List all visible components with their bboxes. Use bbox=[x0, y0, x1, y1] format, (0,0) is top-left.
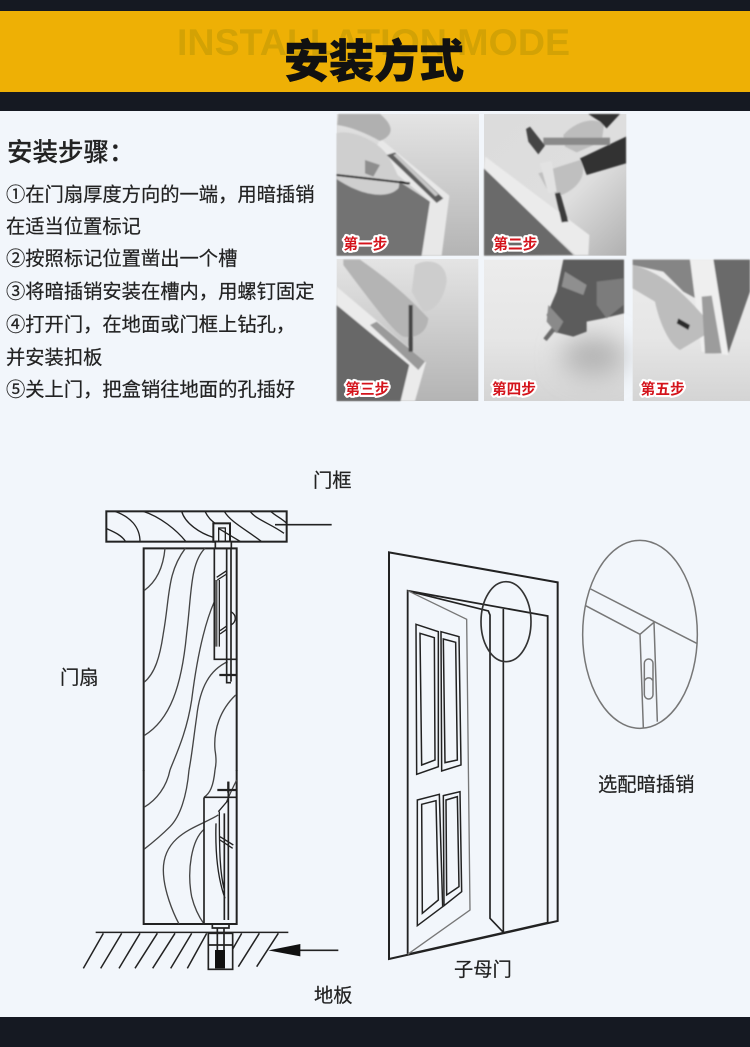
step 5 label: 第五步 bbox=[641, 378, 685, 399]
step 1 label: 第一步 bbox=[343, 233, 387, 254]
step 1: ①在门扇厚度方向的一端，用暗插销 bbox=[6, 179, 314, 207]
photo: step 5 bbox=[633, 260, 750, 401]
arrow: door frame pointer bbox=[275, 522, 332, 527]
floor socket bbox=[208, 933, 233, 969]
header title: 安装方式 bbox=[284, 25, 464, 90]
inner frame bbox=[408, 591, 548, 954]
diagram: flush bolt detail circle bbox=[583, 540, 697, 728]
label: mother and child door: 子母门 bbox=[454, 954, 512, 982]
step 2: ②按照标记位置凿出一个槽 bbox=[6, 243, 237, 271]
photo: step 4 bbox=[484, 260, 625, 401]
door edges bbox=[413, 592, 503, 932]
label: floor: 地板 bbox=[314, 980, 353, 1008]
step 4: ④打开门，在地面或门框上钻孔， bbox=[6, 309, 295, 337]
step 3 label: 第三步 bbox=[345, 378, 389, 399]
label: door frame: 门框 bbox=[313, 465, 352, 493]
diagram: double door perspective bbox=[389, 552, 558, 959]
step 2 label: 第二步 bbox=[493, 233, 537, 254]
door frame section bbox=[106, 511, 332, 548]
detail circle on door bbox=[481, 582, 531, 662]
step 3: ③将暗插销安装在槽内，用螺钉固定 bbox=[6, 276, 314, 304]
diagram: door section bbox=[83, 511, 338, 969]
door panels bbox=[416, 624, 462, 926]
photo: step 3 bbox=[337, 259, 478, 401]
footer band bbox=[0, 1017, 750, 1047]
open door leaf bbox=[408, 591, 470, 954]
steps heading: 安装步骤： bbox=[7, 132, 135, 169]
photo: step 2 bbox=[484, 114, 626, 256]
panel: installation steps text bbox=[6, 132, 314, 402]
step 5: ⑤关上门，把盒销往地面的孔插好 bbox=[6, 374, 295, 402]
step 1 continued: 在适当位置标记 bbox=[6, 211, 141, 239]
header english watermark: INSTALLATION MODE bbox=[177, 22, 570, 63]
door leaf upper bbox=[144, 548, 237, 771]
arrow: floor pointer bbox=[268, 944, 338, 956]
panel: step photos bbox=[337, 114, 750, 401]
step 4 label: 第四步 bbox=[492, 378, 536, 399]
label: door leaf: 门扇 bbox=[60, 662, 99, 690]
floor hatch bbox=[83, 932, 288, 968]
header band bbox=[0, 0, 750, 111]
step 4 continued: 并安装扣板 bbox=[6, 342, 102, 370]
photo: step 1 bbox=[337, 114, 479, 256]
label: optional flush bolt: 选配暗插销 bbox=[598, 769, 694, 797]
outer frame bbox=[389, 552, 558, 959]
door leaf lower bbox=[83, 770, 338, 969]
